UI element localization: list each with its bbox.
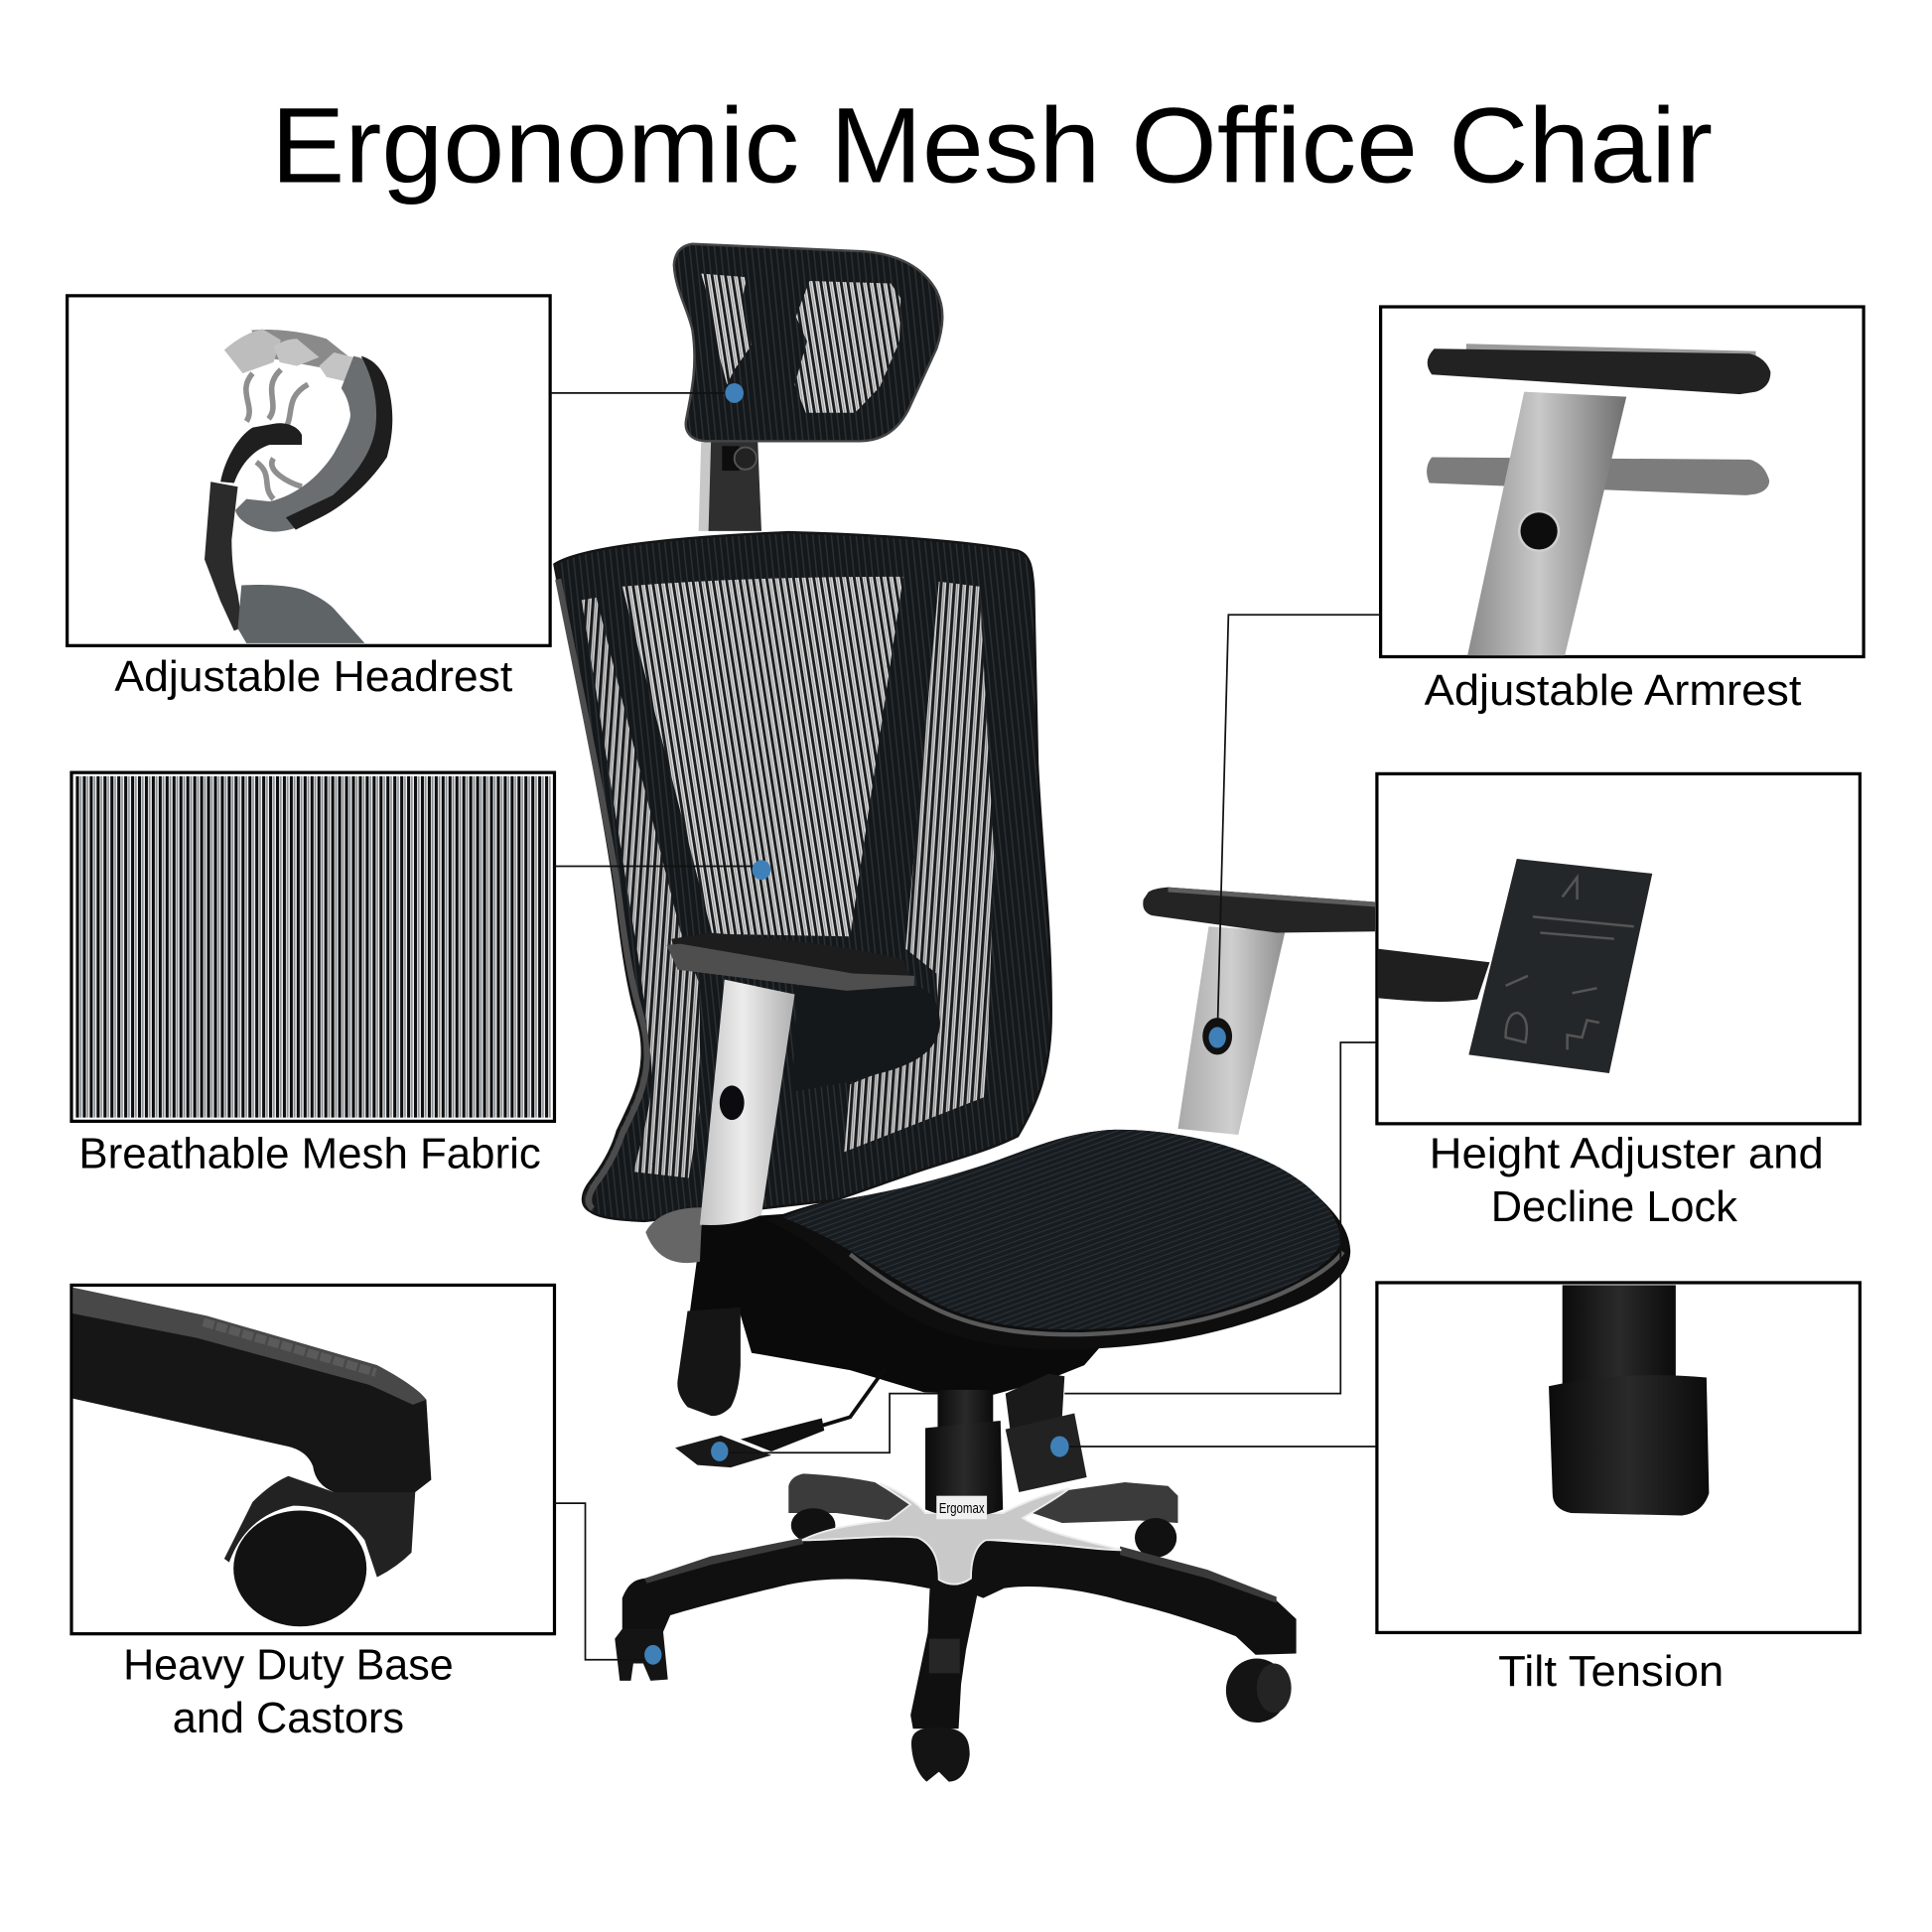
front armrest: [666, 932, 914, 1225]
panel: tilt tension: [1377, 1283, 1860, 1632]
brand label: Ergomax: [939, 1501, 985, 1517]
leader line: height adjuster: [720, 1042, 1376, 1452]
armrest detail illustration: [1427, 344, 1770, 655]
title: Ergonomic Mesh Office Chair: [271, 85, 1713, 206]
panel: heavy duty base and castors: [71, 1285, 554, 1634]
label: breathable mesh fabric: Breathable Mesh Fabric: [78, 1131, 541, 1178]
back mesh: left window: [582, 598, 700, 1177]
label: height adjuster and decline lock: Decline Lock: [1491, 1183, 1737, 1231]
mesh swatch: [75, 776, 551, 1118]
chair illustration: [554, 244, 1375, 1782]
leader line: mesh: [554, 865, 761, 867]
rear armrest: [1143, 888, 1375, 1135]
back mesh: centre window: [622, 577, 903, 936]
marker dots: [644, 383, 1226, 1665]
label: adjustable armrest: Adjustable Armrest: [1425, 667, 1801, 715]
panel: breathable mesh fabric: [71, 772, 554, 1121]
leader line: headrest: [551, 392, 735, 394]
gas lift cylinder: [925, 1390, 1003, 1517]
brand label: [936, 1496, 987, 1519]
lever and paddle: [675, 1369, 885, 1467]
back mesh: right window: [844, 582, 995, 1152]
headrest detail illustration: [205, 329, 392, 643]
tilt knob detail illustration: [1549, 1285, 1709, 1516]
headrest post: [699, 443, 761, 531]
panel: adjustable headrest: [68, 296, 550, 645]
label: height adjuster and decline lock: Height Adjuster and: [1430, 1131, 1824, 1178]
label: adjustable headrest: Adjustable Headrest: [114, 653, 512, 701]
castor detail illustration: [72, 1288, 431, 1626]
label: heavy duty base and castors: and Castors: [173, 1695, 404, 1742]
label: heavy duty base and castors: Heavy Duty Base: [123, 1642, 454, 1690]
headrest mesh: left window: [701, 274, 752, 384]
chair backrest: [554, 532, 1051, 1221]
silver base star: [802, 1483, 1121, 1585]
panel: adjustable armrest: [1381, 307, 1863, 656]
leader line: armrest: [1217, 615, 1380, 1036]
panel: height adjuster and decline lock: [1377, 773, 1860, 1124]
castors: [615, 1629, 1292, 1782]
tilt tension knob: [1006, 1374, 1087, 1492]
leader line: tilt tension: [1059, 1446, 1376, 1448]
label: heavy duty base and castors: [123, 1642, 454, 1742]
paddle detail illustration: [1378, 859, 1652, 1073]
rear base arms: [788, 1473, 1177, 1558]
headrest: [674, 244, 942, 441]
headrest mesh: right window: [794, 281, 900, 413]
under-seat mechanism: [645, 1207, 1109, 1416]
seat: [766, 1130, 1350, 1349]
front base arms: [622, 1534, 1297, 1728]
label: height adjuster and decline lock: [1430, 1131, 1824, 1231]
lumbar pad: [792, 986, 940, 1092]
leader line: base: [554, 1503, 653, 1660]
label: tilt tension: Tilt Tension: [1498, 1648, 1724, 1696]
